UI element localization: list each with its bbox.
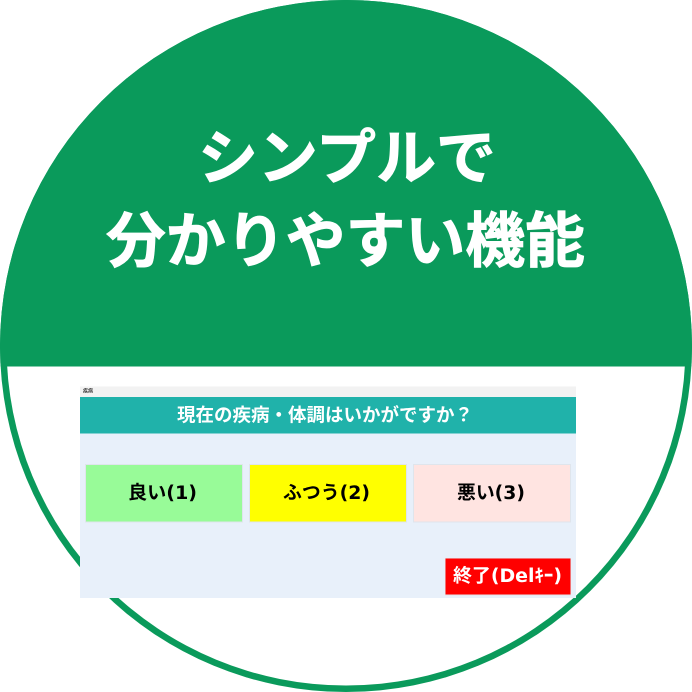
button: bad [413,464,571,522]
button: good: 良い(1) [128,483,197,504]
green heading panel [0,0,692,366]
heading [106,110,585,280]
question banner: 現在の疾病・体調はいかがですか？ [177,402,473,428]
question banner [80,397,576,434]
button: normal [249,464,407,522]
button: quit: 終了(Delｷｰ) [453,566,562,587]
heading: 分かりやすい機能 [106,193,585,280]
button: good [85,464,243,522]
button: normal: ふつう(2) [283,483,370,504]
window title bar: 疾病 [83,388,93,394]
button: bad: 悪い(3) [457,483,525,504]
button: quit [445,558,571,596]
window body [80,397,576,598]
app window screenshot [80,386,576,598]
window title bar [80,386,576,397]
heading: シンプルで [198,110,496,197]
